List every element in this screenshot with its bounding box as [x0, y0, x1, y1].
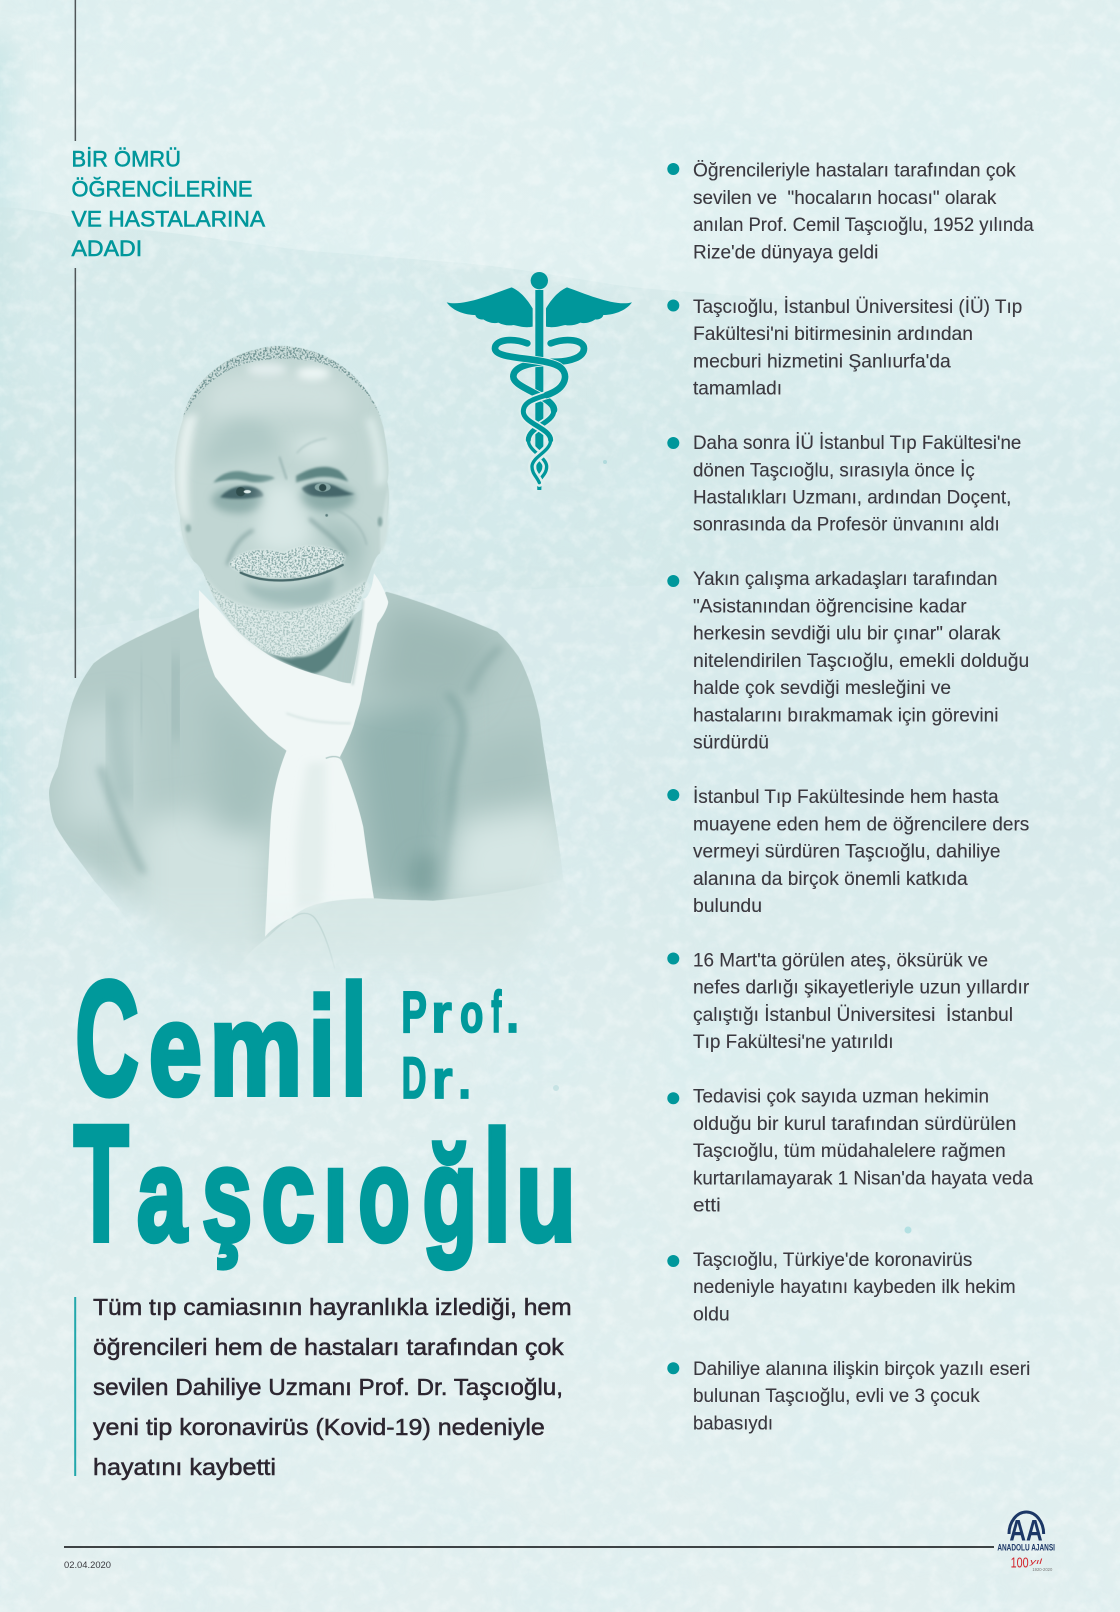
name: Prof.: o: [460, 984, 483, 1044]
chin patch: [243, 575, 334, 607]
right cheek shade: [321, 518, 367, 580]
logo: Anadolu Ajansı: 1920-2020: [1032, 1567, 1053, 1572]
bullet 1: anılan Prof. Cemil Taşcıoğlu, 1952 yılında: [693, 215, 1034, 236]
logo: Anadolu Ajansı: 100: [1011, 1555, 1029, 1571]
body: sweater and scarf: [49, 574, 560, 968]
name: Taşcıoğlu: o: [358, 1122, 410, 1270]
bullet 7: olduğu bir kurul tarafından sürdürülen: [693, 1114, 1016, 1135]
name: Taşcıoğlu: c: [261, 1122, 315, 1270]
scarf: [199, 573, 388, 937]
bullet 9: bulunan Taşcıoğlu, evli ve 3 çocuk: [693, 1386, 980, 1407]
name: Cemil: m: [209, 976, 302, 1122]
name: Prof.: .: [506, 984, 519, 1044]
photo: portrait of Prof. Dr. Cemil Taşcıoğlu: [49, 346, 560, 968]
bullet 2: mecburi hizmetini Şanlıurfa'da: [693, 351, 951, 372]
mouth line: [241, 565, 343, 580]
heading: bir ömrü: ÖĞRENCİLERİNE: [72, 176, 252, 201]
bullet 4: nitelendirilen Taşcıoğlu, emekli dolduğu: [693, 651, 1029, 672]
logo: Anadolu Ajansı: AA: [1009, 1514, 1043, 1547]
logo: Anadolu Ajansı: yıl: [1028, 1557, 1043, 1566]
bullet 2: Taşcıoğlu, İstanbul Üniversitesi (İÜ) Tıp: [693, 297, 1022, 318]
intro paragraph: [93, 1294, 572, 1480]
bullet 5: İstanbul Tıp Fakültesinde hem hasta: [693, 787, 999, 808]
bullet 7: kurtarılamayarak 1 Nisan'da hayata veda: [693, 1168, 1033, 1189]
intro paragraph: öğrencileri hem de hastaları tarafından çok: [93, 1334, 564, 1360]
bullet 1: [667, 161, 1034, 263]
light rim left: [176, 413, 198, 523]
bullet 8: Taşcıoğlu, Türkiye'de koronavirüs: [693, 1250, 972, 1271]
intro paragraph: hayatını kaybetti: [93, 1454, 276, 1480]
bullet 7: [667, 1087, 1033, 1217]
intro paragraph: yeni tip koronavirüs (Kovid-19) nedeniyle: [93, 1414, 545, 1440]
beard: [203, 573, 367, 657]
bullet 8: oldu: [693, 1304, 730, 1326]
logo: Anadolu Ajansı: [997, 1512, 1055, 1572]
vertical rule lower: [75, 268, 76, 678]
eye socket shadows: [212, 487, 265, 513]
name: Dr.: .: [458, 1050, 471, 1110]
vertical rule top: [75, 0, 76, 141]
bullet 6: nefes darlığı şikayetleriyle uzun yıllardır: [693, 978, 1030, 999]
sweater: [49, 592, 560, 958]
name: Cemil: C: [75, 946, 139, 1130]
bullet 9: [667, 1359, 1030, 1434]
bullet 7: Taşcıoğlu, tüm müdahalelere rağmen: [693, 1141, 1006, 1162]
intro rule: [74, 1297, 76, 1476]
smile folds: [227, 530, 253, 565]
heading: bir ömrü: BİR ÖMRÜ: [72, 147, 181, 172]
ears: [380, 487, 388, 553]
bullet 3: sonrasında da Profesör ünvanını aldı: [693, 515, 1000, 536]
bullet 5: [667, 787, 1029, 917]
heading: bir ömrü: ADADI: [72, 236, 142, 261]
bullet 2: [667, 297, 1022, 400]
name: Taşcıoğlu: a: [137, 1122, 187, 1270]
name: Prof.: r: [431, 984, 452, 1044]
bullet 4: Yakın çalışma arkadaşları tarafından: [693, 569, 997, 590]
date: 02.04.2020: [64, 1560, 111, 1570]
skin: [175, 347, 389, 657]
forehead shading: [208, 420, 276, 464]
left eye: [220, 486, 263, 499]
bullet 5: bulundu: [693, 896, 762, 917]
hair: [183, 346, 383, 423]
bullet 4: "Asistanından öğrencisine kadar: [693, 596, 967, 618]
bullet 8: [667, 1250, 1016, 1326]
bullet 4: herkesin sevdiği ulu bir çınar" olarak: [693, 624, 1001, 645]
bullet 6: Tıp Fakültesi'ne yatırıldı: [693, 1032, 894, 1053]
bullet 1: Öğrencileriyle hastaları tarafından çok: [693, 161, 1016, 182]
bullet list: [667, 161, 1034, 1435]
forearm crease: [292, 913, 335, 968]
bullet 5: vermeyi sürdüren Taşcıoğlu, dahiliye: [693, 842, 1000, 862]
name: Dr.: r: [432, 1050, 452, 1110]
name: Taşcıoğlu: ı: [323, 1122, 348, 1270]
heading: bir ömrü: [72, 147, 265, 261]
bullet 7: etti: [693, 1196, 721, 1217]
bullet 3: Daha sonra İÜ İstanbul Tıp Fakültesi'ne: [693, 433, 1021, 454]
bullet 6: çalıştığı İstanbul Üniversitesi İstanbul: [693, 1005, 1013, 1026]
name: Taşcıoğlu: l: [483, 1100, 511, 1274]
left eyebrow: [213, 471, 275, 483]
bullet 5: alanına da birçok önemli katkıda: [693, 869, 968, 890]
name: Cemil: l: [341, 954, 367, 1128]
name: Taşcıoğlu: ş: [202, 1122, 252, 1270]
name: Cemil: i: [308, 970, 335, 1124]
name: Taşcıoğlu: ğ: [422, 1122, 477, 1270]
bullet 3: [667, 433, 1021, 536]
logo: Anadolu Ajansı: ANADOLU AJANSI: [997, 1543, 1055, 1553]
bullet 2: tamamladı: [693, 379, 782, 400]
bullet 6: 16 Mart'ta görülen ateş, öksürük ve: [693, 950, 988, 972]
bullet 4: hastalarını bırakmamak için görevini: [693, 705, 998, 726]
name: Taşcıoğlu: u: [516, 1122, 576, 1270]
right eye: [302, 483, 355, 497]
bullet 9: babasıydı: [693, 1414, 773, 1434]
name: Cemil: e: [149, 976, 202, 1122]
name: Prof.: f: [491, 980, 502, 1045]
bullet 1: Rize'de dünyaya geldi: [693, 242, 878, 263]
name: Taşcıoğlu: T: [74, 1092, 129, 1276]
light rim right: [365, 417, 386, 487]
bullet 6: [667, 950, 1030, 1053]
bullet 1: sevilen ve "hocaların hocası" olarak: [693, 188, 997, 209]
icon: caduceus: [447, 272, 632, 490]
head and face: [175, 346, 389, 657]
name: Prof.: P: [401, 980, 427, 1045]
right eyebrow: [296, 467, 348, 483]
bullet 4: [667, 569, 1029, 754]
nose: [255, 483, 312, 553]
neck shadow and shirt: [260, 617, 354, 674]
intro paragraph: Tüm tıp camiasının hayranlıkla izlediği, hem: [93, 1294, 572, 1320]
bullet 5: muayene eden hem de öğrencilere ders: [693, 814, 1029, 835]
intro paragraph: sevilen Dahiliye Uzmanı Prof. Dr. Taşcıoğlu,: [93, 1374, 563, 1400]
heading: bir ömrü: VE HASTALARINA: [72, 206, 265, 231]
bullet 9: Dahiliye alanına ilişkin birçok yazılı eseri: [693, 1359, 1030, 1380]
bullet 4: halde çok sevdiği mesleğini ve: [693, 678, 951, 699]
bullet 2: Fakültesi'ni bitirmesinin ardından: [693, 324, 973, 345]
name: Dr.: D: [402, 1046, 426, 1111]
moustache: [229, 546, 345, 578]
bullet 3: dönen Taşcıoğlu, sırasıyla önce İç: [693, 460, 975, 481]
forearm: [260, 888, 546, 968]
bullet 4: sürdürdü: [693, 733, 769, 754]
footer rule: [64, 1546, 994, 1548]
bullet 7: Tedavisi çok sayıda uzman hekimin: [693, 1087, 989, 1108]
bullet 3: Hastalıkları Uzmanı, ardından Doçent,: [693, 488, 1011, 508]
bullet 8: nedeniyle hayatını kaybeden ilk hekim: [693, 1277, 1016, 1298]
